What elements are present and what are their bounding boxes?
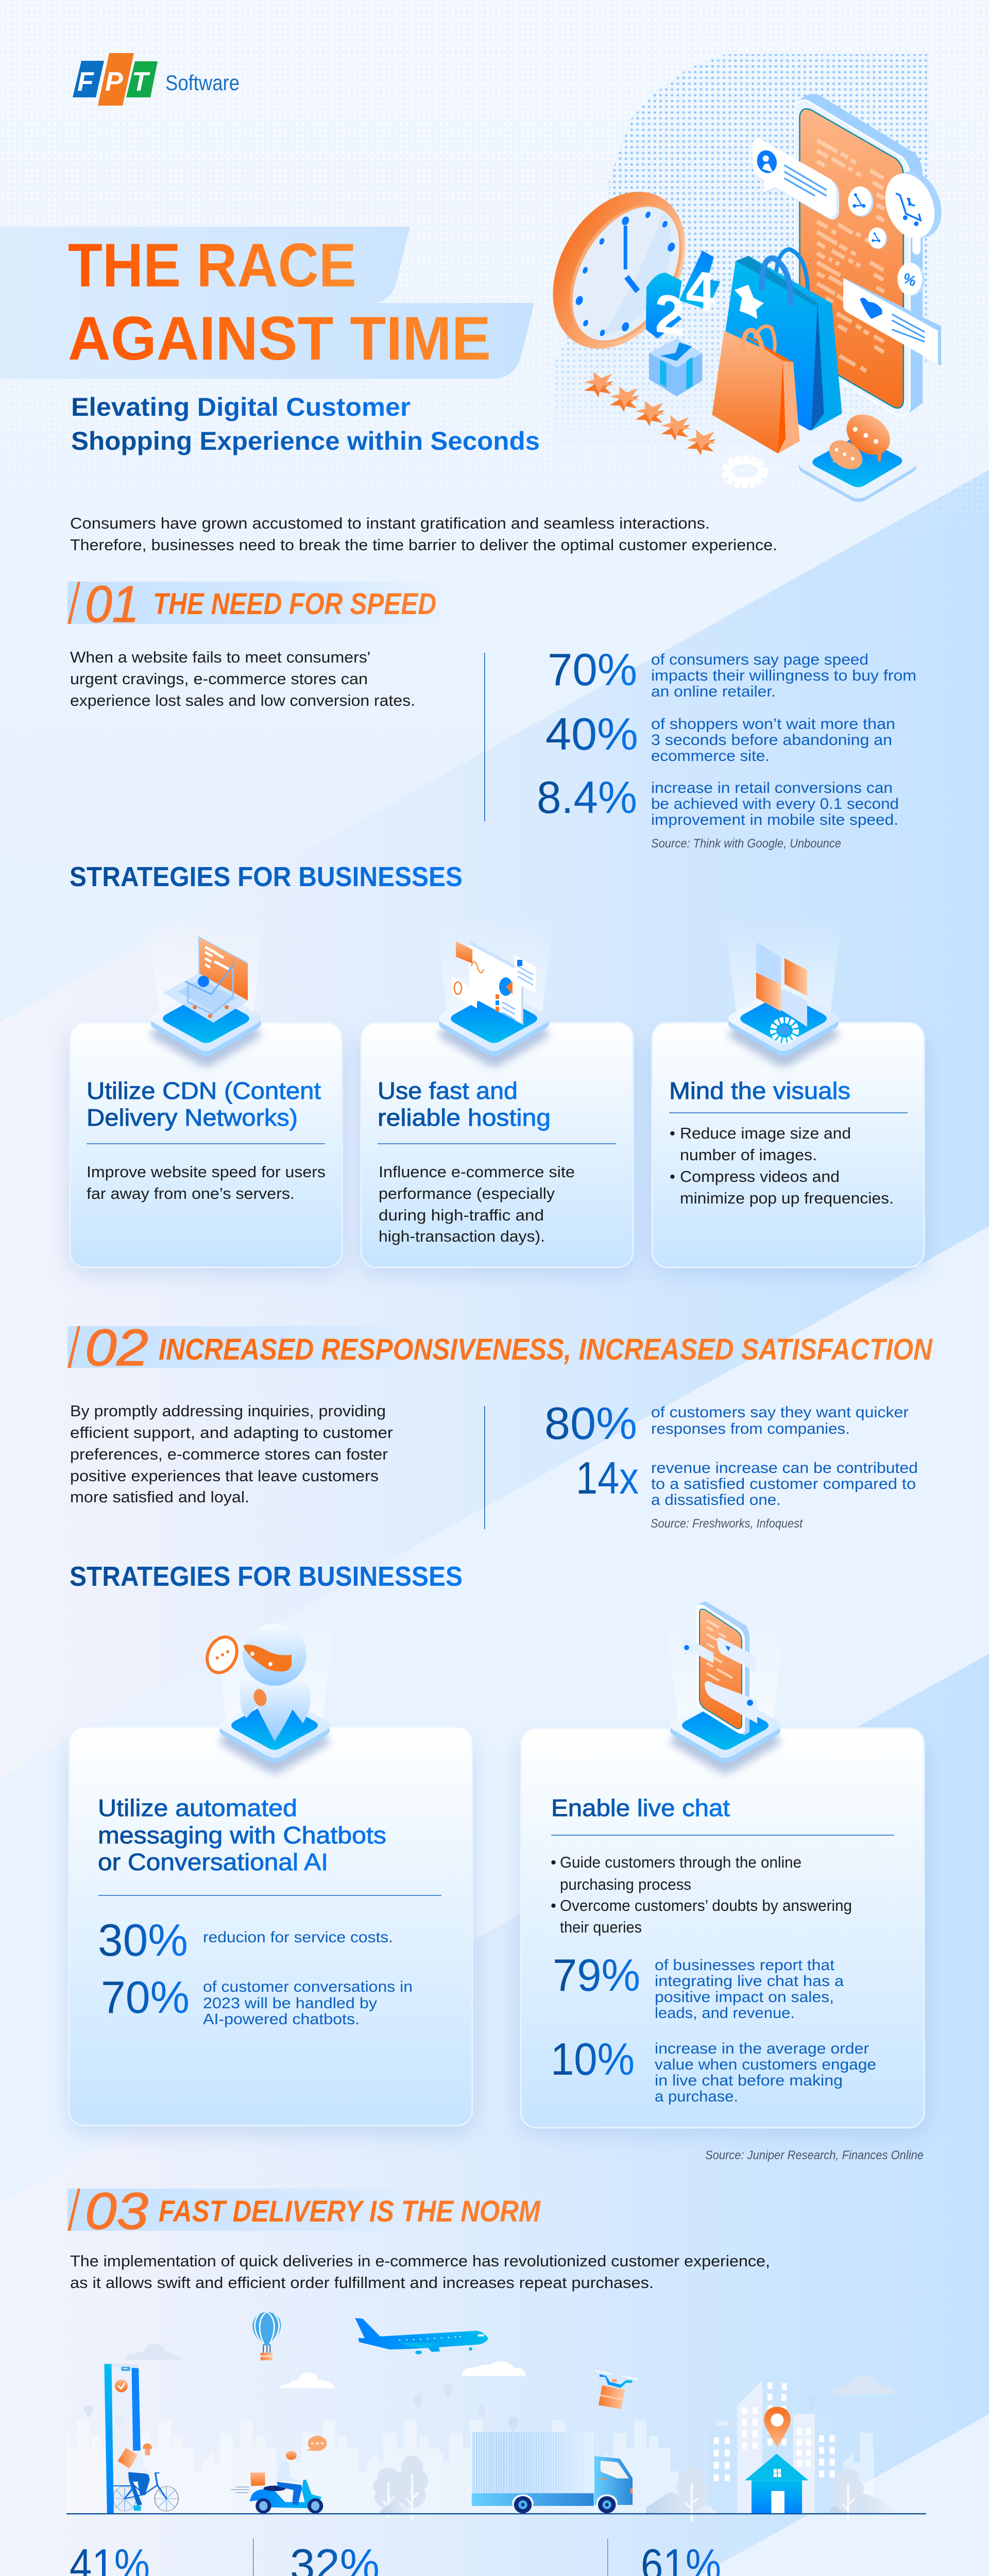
title with ribbon bands: AGAINST TIME: [68, 304, 491, 373]
icon: puzzle pieces on platform: [728, 942, 839, 1066]
panel: utilize CDN: [70, 1023, 343, 1273]
card bullets: •: [551, 1896, 556, 1914]
card bullets: [551, 1853, 852, 1936]
icon: robot on platform: [201, 1624, 330, 1773]
city buildings: [708, 2350, 839, 2514]
intro text: Consumers have grown accustomed to instant gratification and seamless interactions.: [70, 514, 710, 532]
card body: performance (especially: [379, 1184, 555, 1202]
icon: house: [745, 2454, 809, 2514]
stat: 79%: positive impact on sales,: [655, 1989, 834, 2006]
icon: phone with live chat on platform: [670, 1601, 780, 1773]
section 02 header: [67, 1319, 933, 1377]
trees and bushes: [646, 2467, 901, 2522]
source note: Source: Think with Google, Unbounce: [651, 837, 841, 851]
icon: location pin: [764, 2407, 791, 2448]
icon: delivery truck: [472, 2432, 633, 2513]
stat: 10%: increase in the average order: [655, 2040, 869, 2057]
stat: 8.4%: increase in retail conversions can: [651, 779, 893, 796]
section 03 paragraph: The implementation of quick deliveries in e-commerce has revolutionized customer experience,: [70, 2252, 770, 2270]
icon: share and percent badges: %: [901, 269, 918, 290]
stat: 14x: to a satisfied customer compared to: [651, 1476, 916, 1493]
stat: 70%: 2023 will be handled by: [203, 1995, 377, 2012]
trees: [373, 2455, 428, 2520]
intro text: [70, 514, 777, 554]
card body: far away from one’s servers.: [87, 1184, 295, 1202]
stat: 30%: reducion for service costs.: [203, 1929, 393, 1946]
icon: five rating stars: [584, 372, 716, 455]
skyline backdrop: [192, 2420, 874, 2513]
card bullets: •: [551, 1853, 556, 1871]
stat: 70%: impacts their willingness to buy from: [651, 667, 916, 684]
panel: mind the visuals: [652, 1023, 925, 1273]
right part of scene: [462, 2350, 901, 2522]
stat: 40%: [545, 708, 895, 765]
icon: share and percent badges: [848, 187, 925, 296]
white cloud: [462, 2361, 525, 2376]
stat: 8.4%: improvement in mobile site speed.: [651, 811, 898, 828]
stat: 8.4%: be achieved with every 0.1 second: [651, 795, 899, 812]
ground line: [66, 2513, 926, 2514]
faint pins and gray cloud: [508, 2376, 896, 2432]
white cloud: [280, 2372, 335, 2388]
title with ribbon bands: [0, 227, 534, 379]
light beams 2: [214, 1618, 786, 1726]
delivery scene: [39, 2312, 926, 2522]
logo: FPT Software: T: [132, 67, 150, 97]
icon: clock: [526, 167, 712, 374]
card title: Enable live chat: [551, 1794, 730, 1821]
hero illustration: phone, clock, shopping bags: [526, 94, 950, 502]
card title: Mind the visuals: [669, 1077, 850, 1104]
card body: [87, 1163, 326, 1202]
icon: 24 hours numerals: 2: [655, 282, 685, 348]
stat: 14x: a dissatisfied one.: [651, 1492, 781, 1509]
section 02 paragraph: more satisfied and loyal.: [70, 1488, 249, 1506]
stat: 40%: 40%: [545, 708, 638, 759]
source note: Source: Juniper Research, Finances Online: [705, 2148, 924, 2162]
icon: orange shopping bag: [712, 326, 799, 453]
icon: hot air balloon: [252, 2312, 281, 2360]
icon: laptop with cart on platform: [151, 936, 261, 1066]
card bullets: Reduce image size and: [680, 1124, 851, 1142]
icon: phone with cyclist: [104, 2364, 178, 2514]
card bullets: purchasing process: [560, 1875, 691, 1893]
section 03 paragraph: as it allows swift and efficient order fulfillment and increases repeat purchases.: [70, 2274, 654, 2292]
section 03 paragraph: [70, 2252, 770, 2292]
stat: 70%: an online retailer.: [651, 683, 776, 700]
stat: 40%: ecommerce site.: [651, 748, 770, 765]
icon: chat platform: [798, 406, 916, 502]
white cloud right: [470, 2363, 500, 2376]
card title: messaging with Chatbots: [98, 1822, 386, 1849]
stat: 79%: leads, and revenue.: [655, 2005, 795, 2022]
stat: 14x: [576, 1452, 918, 1509]
stat: 10%: [551, 2033, 876, 2105]
stat: 30%: 30%: [98, 1914, 188, 1965]
section 02 paragraph: [70, 1402, 393, 1506]
icon: scooter courier: [231, 2436, 327, 2514]
stat: 30%: [98, 1914, 393, 1965]
card bullets: •: [670, 1167, 675, 1185]
card bullets: their queries: [560, 1918, 642, 1936]
stat: 70%: [101, 1972, 413, 2028]
card body: Influence e-commerce site: [379, 1163, 575, 1181]
light beams: [147, 915, 842, 1023]
icon: shopping cart bubble: [876, 164, 950, 255]
stat: 10%: 10%: [551, 2033, 635, 2084]
card title: or Conversational AI: [98, 1849, 328, 1875]
icon: blue shopping bag: [725, 249, 842, 431]
subtitle: [71, 393, 540, 455]
stat: 79%: integrating live chat has a: [655, 1973, 844, 1990]
heading: strategies 1: STRATEGIES FOR BUSINESSES: [70, 861, 463, 892]
section 03 stats: [69, 2538, 927, 2576]
stat: 70%: 70%: [548, 644, 637, 695]
stat: 14x: 14x: [576, 1452, 639, 1503]
logo: FPT Software: [73, 53, 240, 106]
stat: 79%: of businesses report that: [655, 1957, 835, 1974]
heading: strategies 2: STRATEGIES FOR BUSINESSES: [70, 1561, 463, 1592]
stat: 10%: a purchase.: [655, 2088, 738, 2105]
stat: 70%: of customer conversations in: [203, 1978, 413, 1995]
section 01 paragraph: When a website fails to meet consumers': [70, 648, 370, 666]
card bullets: Overcome customers’ doubts by answering: [560, 1896, 852, 1914]
stat: 10%: value when customers engage: [655, 2056, 876, 2073]
stat: 40%: of shoppers won’t wait more than: [651, 716, 895, 733]
stat: 80%: [544, 1398, 909, 1449]
section 03 header: [67, 2182, 541, 2240]
stat: 14x: revenue increase can be contributed: [651, 1460, 918, 1477]
stat: 8.4%: 8.4%: [537, 772, 637, 823]
stat: 79%: [553, 1950, 844, 2022]
icon: gear: [725, 459, 764, 485]
card body: [379, 1163, 575, 1245]
card title: Utilize automated: [98, 1794, 297, 1821]
stat: 70%: 70%: [101, 1972, 190, 2023]
subtitle: Shopping Experience within Seconds: [71, 427, 540, 455]
section 02 paragraph: preferences, e-commerce stores can foster: [70, 1445, 388, 1463]
panel: fast hosting: [361, 1023, 634, 1273]
card title: [98, 1794, 386, 1875]
stat: 70%: [548, 644, 916, 700]
stat: 80%: responses from companies.: [651, 1420, 850, 1437]
stat: 70%: AI-powered chatbots.: [203, 2011, 360, 2028]
section 02 paragraph: By promptly addressing inquiries, providing: [70, 1402, 386, 1420]
gray cloud: [127, 2344, 182, 2360]
subtitle: Elevating Digital Customer: [71, 393, 411, 421]
card title: [87, 1077, 321, 1131]
card bullets: [670, 1124, 894, 1207]
icon: heart card: [843, 278, 941, 366]
card title: [378, 1077, 551, 1131]
section 01 paragraph: [70, 648, 415, 709]
section 01 header: THE NEED FOR SPEED: [153, 587, 436, 621]
panel: live chat: [520, 1728, 925, 2133]
card title: Delivery Networks): [87, 1104, 298, 1131]
stat: 70%: of consumers say page speed: [651, 651, 868, 668]
section 01 header: [67, 575, 454, 633]
panel: chatbots: [69, 1727, 473, 2133]
stat: 80%: of customers say they want quicker: [651, 1404, 909, 1421]
card bullets: number of images.: [680, 1146, 817, 1164]
icon: smartphone with orange screen: [794, 94, 923, 416]
section 02 paragraph: positive experiences that leave customers: [70, 1467, 379, 1485]
stat: 40%: 3 seconds before abandoning an: [651, 732, 892, 749]
card title: Use fast and: [378, 1077, 518, 1104]
card title: reliable hosting: [378, 1104, 551, 1131]
intro text: Therefore, businesses need to break the time barrier to deliver the optimal customer experience.: [70, 536, 777, 554]
section 01 paragraph: urgent cravings, e-commerce stores can: [70, 670, 368, 688]
card bullets: Compress videos and: [680, 1167, 840, 1185]
card body: Improve website speed for users: [87, 1163, 326, 1181]
faint map pins: [84, 2385, 485, 2431]
section 01 header: 01: [85, 575, 139, 633]
icon: analytics dashboards on platform: [439, 940, 549, 1066]
card title: Utilize CDN (Content: [87, 1077, 321, 1104]
icon: gift box: [649, 338, 702, 396]
icon: drone with parcel: [595, 2371, 638, 2409]
logo: FPT Software: Software: [165, 71, 240, 95]
stat: 8.4%: [537, 772, 899, 828]
left part of scene: [84, 2312, 500, 2520]
logo: FPT Software: P: [105, 67, 123, 97]
card body: during high-traffic and: [379, 1206, 544, 1224]
card bullets: Guide customers through the online: [560, 1853, 802, 1871]
title with ribbon bands: THE RACE: [68, 231, 356, 300]
card bullets: •: [670, 1124, 675, 1142]
section 03 header: FAST DELIVERY IS THE NORM: [159, 2195, 541, 2228]
icon: 24 hours numerals: 4: [686, 258, 715, 324]
card bullets: minimize pop up frequencies.: [680, 1189, 894, 1207]
logo: FPT Software: F: [77, 67, 94, 97]
stat: 79%: 79%: [553, 1950, 640, 2001]
section 02 paragraph: efficient support, and adapting to customer: [70, 1423, 393, 1442]
card body: high-transaction days).: [379, 1227, 545, 1245]
section 03 header: 03: [85, 2182, 148, 2240]
section 02 stats: [544, 1398, 918, 1531]
section 01 stats: [537, 644, 916, 851]
icon: 24 hours numerals: [646, 250, 720, 348]
stat: 80%: 80%: [544, 1398, 637, 1449]
source note: Source: Freshworks, Infoquest: [651, 1517, 803, 1531]
icon: profile chat bubble: [752, 138, 839, 219]
icon: airplane: [355, 2318, 488, 2354]
stat: 10%: in live chat before making: [655, 2072, 843, 2089]
section 01 paragraph: experience lost sales and low conversion rates.: [70, 691, 415, 709]
section 02 header: 02: [85, 1319, 148, 1377]
